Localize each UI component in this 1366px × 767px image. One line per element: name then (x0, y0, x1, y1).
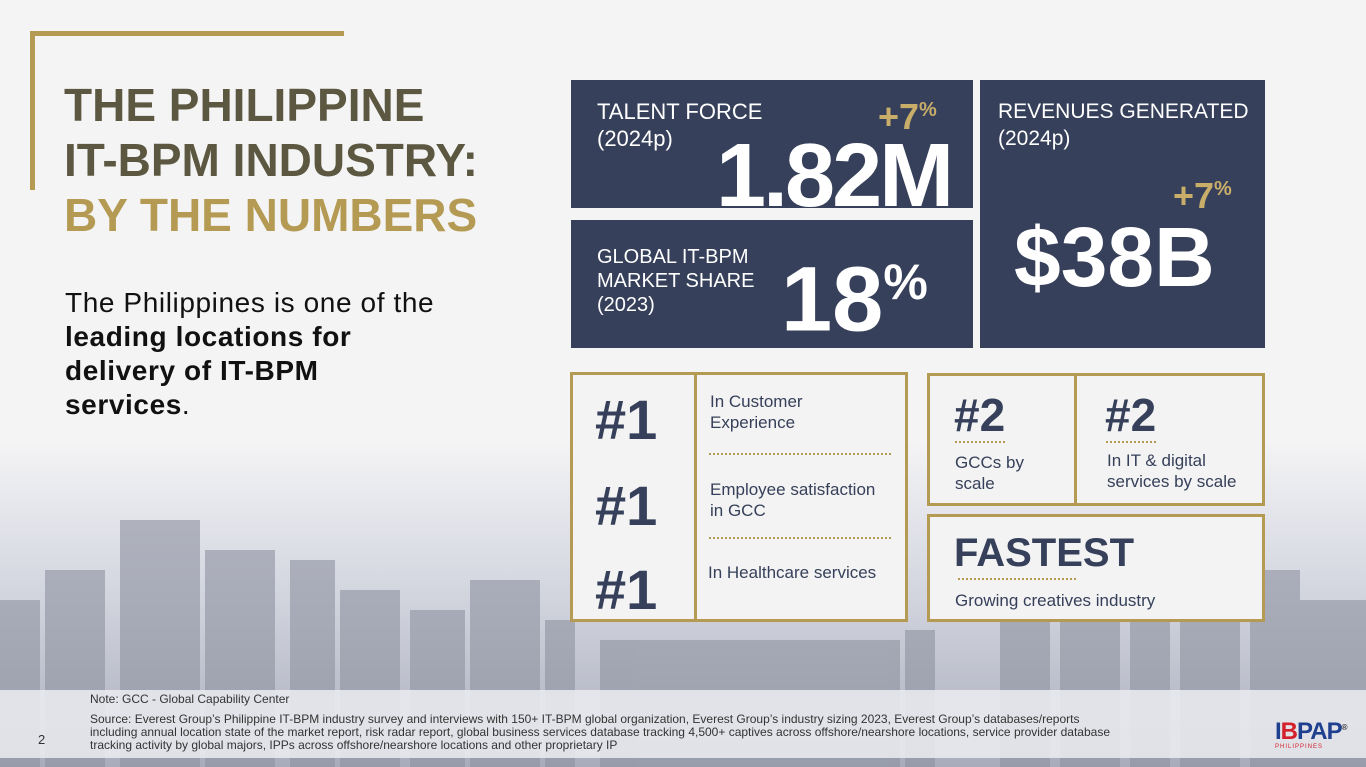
panel: #1 rankings: in GCC (710, 501, 766, 520)
panel: revenues: REVENUES GENERATED (998, 100, 1248, 123)
panel: #1 rankings: In Customer (710, 392, 803, 411)
panel: market share: (2023) (597, 294, 655, 316)
title: THE PHILIPPINE (64, 79, 424, 131)
panel: revenues (980, 80, 1265, 348)
panel: talent force: +7% (878, 96, 937, 137)
panel: #2 rankings: GCCs by (955, 453, 1024, 472)
panel: #2 rankings (927, 373, 1265, 506)
panel: #2 rankings: In IT & digital (1107, 451, 1206, 470)
background cityscape (0, 440, 1366, 767)
panel: #2 rankings: #2 (954, 389, 1005, 441)
panel: revenues: $38B (1014, 210, 1215, 304)
footer notes: Source: Everest Group’s Philippine IT-BPM industry survey and interviews with 150+ IT-BPM global organization, Everest Group’s industry sizing 2023, Everest Group’s databases/reports including annual location state of the market report, risk radar report, global business services database tracking 4,500+ captives across offshore/nearshore locations, service provider database tracking activity by global majors, IPPs across offshore/nearshore locations and other proprietary IP (90, 712, 1110, 752)
intro text: The Philippines is one of the (65, 287, 434, 318)
panel: market share: GLOBAL IT-BPM (597, 246, 749, 268)
panel: #1 rankings: Employee satisfaction (710, 480, 875, 499)
panel: #1 rankings: In Healthcare services (708, 563, 876, 582)
footer notes: Note: GCC - Global Capability Center (90, 692, 289, 706)
intro text (65, 287, 434, 420)
panel: talent force (571, 80, 973, 208)
panel: revenues: (2024p) (998, 127, 1070, 150)
logo: IBPAP: IBPAP® (1275, 718, 1346, 745)
gold bracket (30, 31, 344, 36)
logo: IBPAP: PHILIPPINES (1275, 744, 1323, 750)
panel: fastest: FASTEST (954, 531, 1134, 575)
panel: #1 rankings (570, 372, 908, 622)
title: IT-BPM INDUSTRY: (64, 134, 478, 186)
footer notes: 2 (38, 732, 45, 747)
footer notes (0, 690, 1366, 758)
panel: #1 rankings: #1 (595, 388, 657, 451)
intro text: services. (65, 389, 190, 420)
panel: talent force: (2024p) (597, 126, 673, 151)
panel: #2 rankings: scale (955, 474, 995, 493)
panel: #1 rankings: #1 (595, 558, 657, 621)
panel: #2 rankings: services by scale (1107, 472, 1236, 491)
title: BY THE NUMBERS (64, 189, 477, 241)
panel: #1 rankings: Experience (710, 413, 795, 432)
intro text: leading locations for (65, 321, 351, 352)
panel: market share: MARKET SHARE (597, 270, 754, 292)
panel: fastest: Growing creatives industry (955, 591, 1155, 610)
panel: #1 rankings: #1 (595, 474, 657, 537)
intro text: delivery of IT-BPM (65, 355, 319, 386)
panel: talent force: TALENT FORCE (597, 99, 762, 124)
panel: revenues: +7% (1173, 175, 1232, 216)
panel: fastest (927, 514, 1265, 622)
panel: #2 rankings: #2 (1105, 389, 1156, 441)
panel: talent force: 1.82M (716, 126, 951, 226)
panel: market share (571, 220, 973, 348)
title (64, 79, 478, 241)
panel: market share: 18% (781, 249, 928, 351)
